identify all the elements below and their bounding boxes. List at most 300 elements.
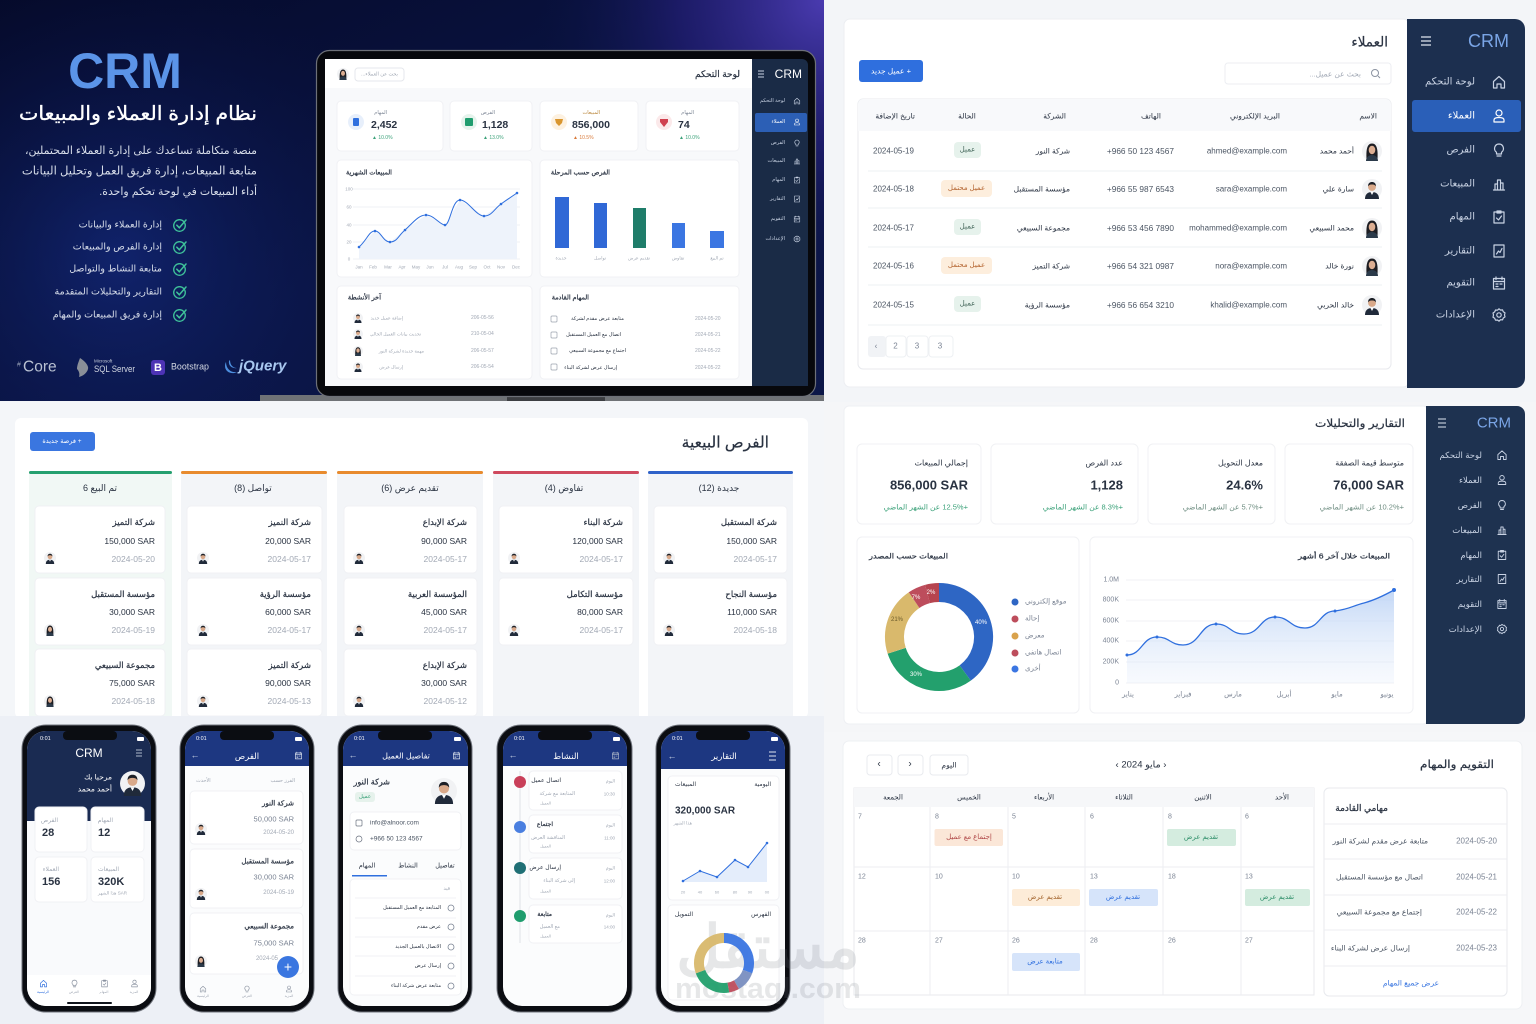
recent activity card: 206-05-56 <box>471 315 494 321</box>
column: contact: 20,000 SAR <box>265 536 311 546</box>
upcoming tasks card: المهام القادمة <box>552 294 589 302</box>
recent activity card: آخر الأنشطة <box>348 292 382 302</box>
phone 4: activity timeline: اليوم <box>606 778 615 784</box>
phone 5: reports: 320,000 SAR <box>675 806 736 816</box>
row 5: 2024-05-15 <box>873 300 914 310</box>
phone 3: customer details: info@alnoor.com <box>370 820 419 826</box>
button: new opportunity: + فرصة جديدة <box>42 438 82 445</box>
phone 2: opportunities: 2024-05-20 <box>263 830 295 836</box>
dashboard sidebar: CRM <box>775 67 802 81</box>
column: contact: 2024-05-17 <box>268 625 311 635</box>
chart: monthly sales line: Nov <box>497 264 506 270</box>
chart: monthly sales line: 0 <box>348 256 351 262</box>
chart: sales last six months area: 400K <box>1103 638 1119 644</box>
dashboard stat cards: 2,452 <box>371 119 397 131</box>
calendar buttons: ‹ <box>877 758 881 770</box>
phone 2: opportunities: الأحدث <box>196 777 211 784</box>
calendar grid: 6 <box>1090 814 1094 820</box>
calendar grid: الأحد <box>1275 792 1289 802</box>
pagination: ‹ <box>875 342 878 350</box>
phone 2: opportunities: 75,000 SAR <box>254 938 295 948</box>
calendar grid: 26 <box>1168 938 1176 944</box>
chart: opportunities by stage bars: تواصل <box>594 256 607 260</box>
column: new: 2024-05-17 <box>734 554 777 564</box>
chart: opportunities by stage bars: جديدة <box>555 256 567 260</box>
dashboard sidebar: العملاء <box>771 119 785 125</box>
chart: monthly sales line: Dec <box>512 264 521 270</box>
row 4: شركة التميز <box>1032 262 1070 270</box>
phone 4: activity timeline: العميل <box>540 934 551 938</box>
recent activity card: تحديث بيانات العميل الحالي <box>370 332 422 336</box>
chart: opportunities by stage bars: الفرص حسب المرحلة <box>551 170 610 176</box>
dashboard stat cards: المهام <box>681 110 694 116</box>
feature checklist: إدارة الفرص والمبيعات <box>73 242 162 252</box>
row 3: +966 53 456 7890 <box>1107 223 1174 233</box>
phone 5: reports: الفهرس <box>751 911 771 918</box>
laptop screen main area <box>325 59 752 386</box>
phone 2: opportunities: شركة النور <box>261 800 294 808</box>
KPI: opportunities: 1,128 <box>1090 478 1123 492</box>
chart: sales by source donut: معرض <box>1025 632 1045 640</box>
upcoming tasks list: عرض جميع المهام <box>1383 978 1439 988</box>
calendar grid: الخميس <box>957 794 981 802</box>
upcoming tasks card: متابعة عرض مقدم لشركة <box>571 316 624 322</box>
row 4: 2024-05-16 <box>873 262 914 270</box>
phone 4: activity timeline: المتابعة مع شركة <box>540 791 575 797</box>
technology logos: Bootstrap <box>171 362 209 372</box>
chart: opportunities by stage bars: تقديم عرض <box>628 256 651 262</box>
technology logos: jQuery <box>237 358 287 374</box>
calendar buttons: › <box>908 758 912 770</box>
row 2: سارة علي <box>1323 184 1354 194</box>
dashboard stat cards <box>337 101 739 151</box>
phone 2: opportunities: 2024-05-19 <box>263 890 295 896</box>
recent activity card: 206-05-54 <box>471 364 494 370</box>
phone 1: home: العملاء <box>43 866 59 873</box>
chart: sales by source donut: 7% <box>912 595 921 601</box>
chart: sales last six months area: 600K <box>1103 618 1119 624</box>
column: won: 2024-05-20 <box>112 554 155 564</box>
upcoming tasks list: متابعة عرض مقدم لشركة النور <box>1331 836 1428 846</box>
customers sidebar: التقارير <box>1444 246 1475 256</box>
phone 5: reports: التقارير <box>710 751 737 761</box>
column: won: شركة التميز <box>112 517 155 527</box>
reports sidebar: الإعدادات <box>1449 624 1482 635</box>
chart: sales last six months area <box>1090 537 1413 713</box>
dashboard header <box>325 59 752 88</box>
row 2: 2024-05-18 <box>873 184 914 194</box>
dashboard stat cards: 1,128 <box>482 119 508 131</box>
search box <box>1225 63 1391 84</box>
dashboard sidebar: الإعدادات <box>765 236 785 242</box>
customers table: الهاتف <box>1141 112 1161 120</box>
row 4 <box>873 256 1382 276</box>
KPI: conversion <box>1148 444 1275 524</box>
dashboard stat cards: ▲ 10.0% <box>372 135 393 141</box>
phone 4: activity timeline: المناقشة العرض <box>531 835 565 841</box>
column: proposal: شركة الإبداع <box>423 517 467 528</box>
phone 2: opportunities: مجموعة السبيعي <box>244 924 294 930</box>
upcoming tasks card <box>540 286 739 379</box>
chart: sales by source donut: 2% <box>927 590 936 596</box>
technology logos <box>17 358 287 377</box>
dashboard stat cards: 74 <box>678 119 690 131</box>
row 4: عميل محتمل <box>948 262 985 269</box>
row 2: sara@example.com <box>1216 184 1287 194</box>
column: new: جديدة (12) <box>699 483 739 493</box>
button: new customer <box>859 60 923 82</box>
phone 2: opportunities: 0:01 <box>196 736 207 742</box>
calendar grid: 27 <box>935 938 943 944</box>
column: won: 75,000 SAR <box>109 678 155 688</box>
upcoming tasks list: 2024-05-21 <box>1456 872 1498 882</box>
phone 1: home: 0:01 <box>40 736 51 742</box>
column: won: 2024-05-18 <box>112 696 155 706</box>
column: new: 2024-05-18 <box>734 625 777 635</box>
calendar grid: 6 <box>1245 814 1249 820</box>
chart: monthly sales line: 40 <box>346 222 352 228</box>
chart: sales last six months area: 0 <box>1115 680 1119 686</box>
calendar grid: 10 <box>935 874 943 880</box>
row 2 <box>873 179 1382 199</box>
KPI: total sales: إجمالي المبيعات <box>914 458 968 468</box>
row 2: +966 55 987 6543 <box>1107 184 1174 194</box>
column: proposal: 45,000 SAR <box>421 607 467 617</box>
row 1: 2024-05-19 <box>873 146 914 156</box>
customers table <box>858 99 1391 369</box>
phone 2: opportunities: 50,000 SAR <box>254 814 295 824</box>
panel: sales opportunities kanban <box>0 402 824 718</box>
phone 4: activity timeline <box>497 725 632 1012</box>
column: negotiation: 2024-05-17 <box>580 554 623 564</box>
panel: mobile phones strip <box>0 716 824 1024</box>
column: contact: 90,000 SAR <box>265 678 311 688</box>
phone 1: home: الفرص <box>69 990 79 994</box>
dashboard sidebar <box>752 59 808 386</box>
row 3: محمد السبيعي <box>1309 224 1354 232</box>
customers sidebar: الفرص <box>1446 144 1475 156</box>
recent activity card <box>337 286 532 379</box>
hero heading: نظام إدارة العملاء والمبيعات <box>19 103 257 126</box>
column: contact <box>181 471 327 716</box>
phone 3: customer details: +966 50 123 4567 <box>370 836 423 842</box>
phone 5: reports: 90 <box>748 890 753 894</box>
column: proposal: 2024-05-17 <box>424 554 467 564</box>
row 3: 2024-05-17 <box>873 224 914 232</box>
upcoming tasks list: إرسال عرض لشركة البناء <box>1331 944 1410 952</box>
column: contact: شركة النميز <box>268 517 311 527</box>
phone 1: home: المزيد <box>130 990 138 994</box>
dashboard stat cards: ▲ 10.0% <box>679 135 700 141</box>
feature checklist <box>53 220 186 321</box>
row 5: عميل <box>960 300 975 308</box>
calendar grid: 8 <box>935 814 939 820</box>
technology logos: SQL Server <box>94 364 135 374</box>
phone 1: home: الرئيسية <box>37 990 49 994</box>
KPI: avg deal: 76,000 SAR <box>1333 478 1405 492</box>
watermark: mostaql: mostaql.com <box>675 973 861 1005</box>
column: proposal: 2024-05-12 <box>424 696 467 706</box>
dashboard stat cards: ▲ 10.5% <box>573 135 594 141</box>
row 3: عميل <box>960 224 975 230</box>
chart: sales by source donut: موقع إلكتروني <box>1025 598 1067 606</box>
calendar grid: 10 <box>1012 874 1020 880</box>
calendar events: تقديم عرض <box>1106 894 1140 901</box>
column: proposal: 2024-05-17 <box>424 625 467 635</box>
customers table: البريد الإلكتروني <box>1230 112 1280 120</box>
dashboard stat cards: 856,000 <box>572 119 610 131</box>
phone 4: activity timeline: ← <box>508 750 518 760</box>
phone 5: reports: 20 <box>681 890 686 894</box>
customers sidebar: العملاء <box>1448 110 1475 122</box>
panel: hero with laptop dashboard <box>0 0 824 401</box>
row 5: خالد الحربي <box>1317 300 1354 310</box>
row 3 <box>873 218 1382 238</box>
laptop frame <box>316 50 816 396</box>
phone 3: customer details: النشاط <box>398 862 418 870</box>
row 5: مؤسسة الرؤية <box>1025 300 1070 310</box>
KPI: conversion: 24.6% <box>1226 478 1263 492</box>
phone 4: activity timeline: اجتماع <box>537 821 553 828</box>
upcoming tasks card: 2024-05-22 <box>695 365 721 371</box>
column: won: مؤسسة المستقبل <box>91 589 155 599</box>
column: new <box>648 471 793 716</box>
phone 1: home: 12 <box>98 827 110 839</box>
phone 2: opportunities: مؤسسة المستقبل <box>241 858 294 866</box>
row 4: نورة خالد <box>1325 262 1354 270</box>
phone 2: opportunities <box>180 725 314 1012</box>
chart: monthly sales line: Aug <box>455 264 463 270</box>
chart: opportunities by stage bars <box>540 160 739 277</box>
phone 5: reports: 40 <box>698 890 703 894</box>
row 4: +966 54 321 0987 <box>1107 261 1174 271</box>
phone 3: customer details: تفاصيل العميل <box>382 752 430 760</box>
row 2: عميل محتمل <box>948 185 985 192</box>
phone 1: home: 28 <box>42 827 54 839</box>
column: contact: 2024-05-13 <box>268 696 311 706</box>
customers table: تاريخ الإضافة <box>875 112 915 120</box>
KPI: opportunities: عدد الفرص <box>1085 458 1123 468</box>
column: proposal: شركة الإبداع <box>423 660 467 671</box>
column: negotiation: تفاوض (4) <box>545 483 584 493</box>
calendar buttons <box>867 755 968 775</box>
phone 2: opportunities: المزيد <box>285 994 293 998</box>
phone 3: customer details: قيد <box>443 886 451 892</box>
chart: sales last six months area: أبريل <box>1276 690 1292 698</box>
column: contact: مؤسسة الرؤية <box>260 589 311 599</box>
phone 1: home: هذا الشهر SAR <box>97 890 128 896</box>
feature checklist: التقارير والتحليلات المتقدمة <box>55 286 162 298</box>
phone 3: customer details: 0:01 <box>354 736 365 742</box>
phone 5: reports: اليومية <box>754 781 771 788</box>
phone 1: home: المهام <box>100 990 108 995</box>
kanban heading: الفرص البيعية <box>682 434 769 452</box>
customers sidebar: المبيعات <box>1440 178 1475 190</box>
chart: monthly sales line <box>337 160 532 277</box>
phone 1: home: أحمد محمد <box>78 784 112 794</box>
phone 2: opportunities: الفرز حسب <box>271 778 295 784</box>
chart: sales by source donut: 30% <box>910 672 923 678</box>
chart: sales by source donut: المبيعات حسب المصدر <box>868 552 948 560</box>
chart: sales by source donut: 40% <box>975 620 988 626</box>
row 4: nora@example.com <box>1215 262 1287 270</box>
chart: sales last six months area: مايو <box>1330 692 1343 698</box>
dashboard header: لوحة التحكم <box>695 69 740 80</box>
customers sidebar <box>1407 19 1525 388</box>
feature checklist: متابعة النشاط والتواصل <box>69 264 162 274</box>
upcoming tasks card: اجتماع مع مجموعة السبيعي <box>569 348 626 354</box>
upcoming tasks list: 2024-05-20 <box>1456 836 1498 846</box>
reports sidebar: المبيعات <box>1452 525 1482 535</box>
chart: sales by source donut: أخرى <box>1025 664 1041 672</box>
phone 4: activity timeline: 10:30 <box>604 792 615 796</box>
phone 3: customer details: شركة النور <box>352 778 390 786</box>
phone 3: customer details: تفاصيل <box>435 862 455 870</box>
phone 5: reports: 00 <box>765 890 770 894</box>
dashboard sidebar: التقارير <box>769 196 785 202</box>
chart: monthly sales line: Jul <box>442 264 448 270</box>
chart: sales last six months area: 800K <box>1103 596 1119 604</box>
pagination: 2 <box>893 342 898 350</box>
upcoming tasks card: 2024-05-20 <box>695 316 721 322</box>
KPI: total sales: 856,000 SAR <box>890 478 969 492</box>
column: won: 2024-05-19 <box>112 625 155 635</box>
calendar grid: 8 <box>1168 814 1172 820</box>
calendar grid: 13 <box>1090 874 1098 880</box>
phone 4: activity timeline: العميل <box>540 844 551 848</box>
row 1: عميل <box>960 146 975 154</box>
upcoming tasks list <box>1324 788 1507 996</box>
phone 4: activity timeline: إرسال عرض <box>529 864 561 871</box>
row 3: مجموعة السبيعي <box>1017 224 1070 232</box>
column: new: مؤسسة النجاح <box>725 589 777 599</box>
phone 3: customer details: إرسال عرض <box>415 963 442 969</box>
phone 4: activity timeline: العميل <box>540 800 551 806</box>
dashboard stat cards: ▲ 13.0% <box>483 135 504 141</box>
calendar heading: التقويم والمهام <box>1420 759 1494 771</box>
chart: sales by source donut: 21% <box>891 617 904 623</box>
calendar buttons: اليوم <box>941 760 957 770</box>
recent activity card: مهمة جديدة لشركة النور <box>378 348 425 354</box>
reports heading: التقارير والتحليلات <box>1315 418 1405 430</box>
KPI: total sales: +12.5% عن الشهر الماضي <box>884 502 969 512</box>
dashboard header: بحث عن العملاء... <box>361 72 398 78</box>
hero description: متابعة المبيعات، إدارة فريق العمل وتحليل البيانات <box>22 164 257 178</box>
row 2: مؤسسة المستقبل <box>1014 184 1070 194</box>
column: won: 30,000 SAR <box>109 607 155 617</box>
calendar grid: 5 <box>1012 814 1016 820</box>
customers sidebar: التقويم <box>1446 278 1475 288</box>
upcoming tasks list: إجتماع مع مجموعة السبيعي <box>1337 908 1422 916</box>
watermark: mostaql: مستقل <box>676 914 860 980</box>
dashboard sidebar: التقويم <box>771 216 785 222</box>
column: won: 150,000 SAR <box>104 536 155 546</box>
customers sidebar: الإعدادات <box>1436 310 1475 320</box>
phone 5: reports: 0:01 <box>672 736 683 742</box>
phone 2: opportunities: الفرص <box>235 751 259 761</box>
chart: monthly sales line: 20 <box>346 240 352 244</box>
recent activity card: إرسال عرض <box>379 364 403 370</box>
row 1 <box>873 141 1382 161</box>
phone 4: activity timeline: 14:00 <box>604 924 615 930</box>
column: proposal: 90,000 SAR <box>421 536 467 546</box>
phone 4: activity timeline: العميل <box>540 888 551 894</box>
chart: sales last six months area: يناير <box>1121 692 1134 698</box>
chart: sales by source donut <box>857 537 1079 713</box>
calendar grid: 13 <box>1245 874 1253 880</box>
calendar grid: 27 <box>1245 938 1253 944</box>
phone 3: customer details <box>338 725 472 1012</box>
chart: monthly sales line: Feb <box>369 264 377 270</box>
phone 1: home: 320K <box>98 876 124 888</box>
chart: opportunities by stage bars: تفاوض <box>672 256 685 260</box>
calendar events <box>934 829 1310 971</box>
calendar grid <box>854 788 1314 995</box>
column: contact: تواصل (8) <box>234 483 272 493</box>
phone 2: opportunities: 30,000 SAR <box>254 872 295 882</box>
phone 4: activity timeline: اليوم <box>606 912 615 918</box>
pagination: 3 <box>938 342 943 350</box>
phone 1: home: المبيعات <box>98 866 119 873</box>
phone 1: home: مرحبا بك <box>84 772 112 782</box>
column: contact: 60,000 SAR <box>265 607 311 617</box>
row 1: شركة النور <box>1035 146 1070 156</box>
upcoming tasks list: اتصال مع مؤسسة المستقبل <box>1336 872 1423 882</box>
calendar grid: الثلاثاء <box>1115 794 1133 802</box>
KPI: conversion: +5.7% عن الشهر الماضي <box>1183 502 1264 512</box>
phone 5: reports: هذا الشهر <box>673 820 693 826</box>
calendar grid: الاثنين <box>1194 794 1212 802</box>
customers table: الشركة <box>1043 112 1066 120</box>
chart: monthly sales line: Mar <box>384 264 392 270</box>
column: proposal: تقديم عرض (6) <box>381 483 439 494</box>
reports sidebar: لوحة التحكم <box>1439 450 1482 461</box>
column: proposal <box>337 471 483 716</box>
chart: monthly sales line: Sep <box>469 264 477 270</box>
phone 1: home: الفرص <box>41 817 58 824</box>
phone 4: activity timeline: اليوم <box>606 822 615 828</box>
upcoming tasks list: 2024-05-23 <box>1456 944 1498 952</box>
calendar grid: 12 <box>858 874 866 880</box>
recent activity card: 210-05-04 <box>471 331 494 337</box>
feature checklist: إدارة فريق المبيعات والمهام <box>53 310 162 320</box>
chart: sales by source donut: إحالة <box>1025 616 1039 622</box>
phone 4: activity timeline: إلى شركة البناء <box>543 878 576 884</box>
phone 5: reports <box>656 725 790 1012</box>
pagination: 3 <box>915 342 920 350</box>
chart: sales last six months area: 1.0M <box>1103 576 1119 584</box>
hero description: منصة متكاملة تساعدك على إدارة العملاء المحتملين، <box>25 145 257 157</box>
search box: بحث عن عميل... <box>1309 70 1361 78</box>
recent activity card: 206-05-57 <box>471 348 494 354</box>
month switcher: ‹ مايو 2024 › <box>1116 760 1166 770</box>
chart: monthly sales line: المبيعات الشهرية <box>346 170 392 176</box>
phone 3: customer details: المتابعة مع العميل المستقبل <box>383 905 441 911</box>
upcoming tasks card: اتصال مع العميل المستقبل <box>566 332 621 338</box>
calendar grid: الأربعاء <box>1034 792 1054 802</box>
calendar grid: 26 <box>1012 938 1020 944</box>
column: negotiation: مؤسسة التكامل <box>567 589 623 599</box>
chart: monthly sales line: Oct <box>483 264 491 270</box>
phone 1: home <box>22 725 156 1012</box>
phone 5: reports: 80 <box>733 890 738 894</box>
dashboard sidebar: لوحة التحكم <box>760 98 785 104</box>
column: negotiation: شركة البناء <box>584 517 623 527</box>
phone 5: reports: التمويل <box>675 911 693 918</box>
calendar grid: 18 <box>1168 874 1176 880</box>
chart: sales last six months area: 200K <box>1103 658 1119 666</box>
phone 4: activity timeline: 0:01 <box>514 736 525 742</box>
